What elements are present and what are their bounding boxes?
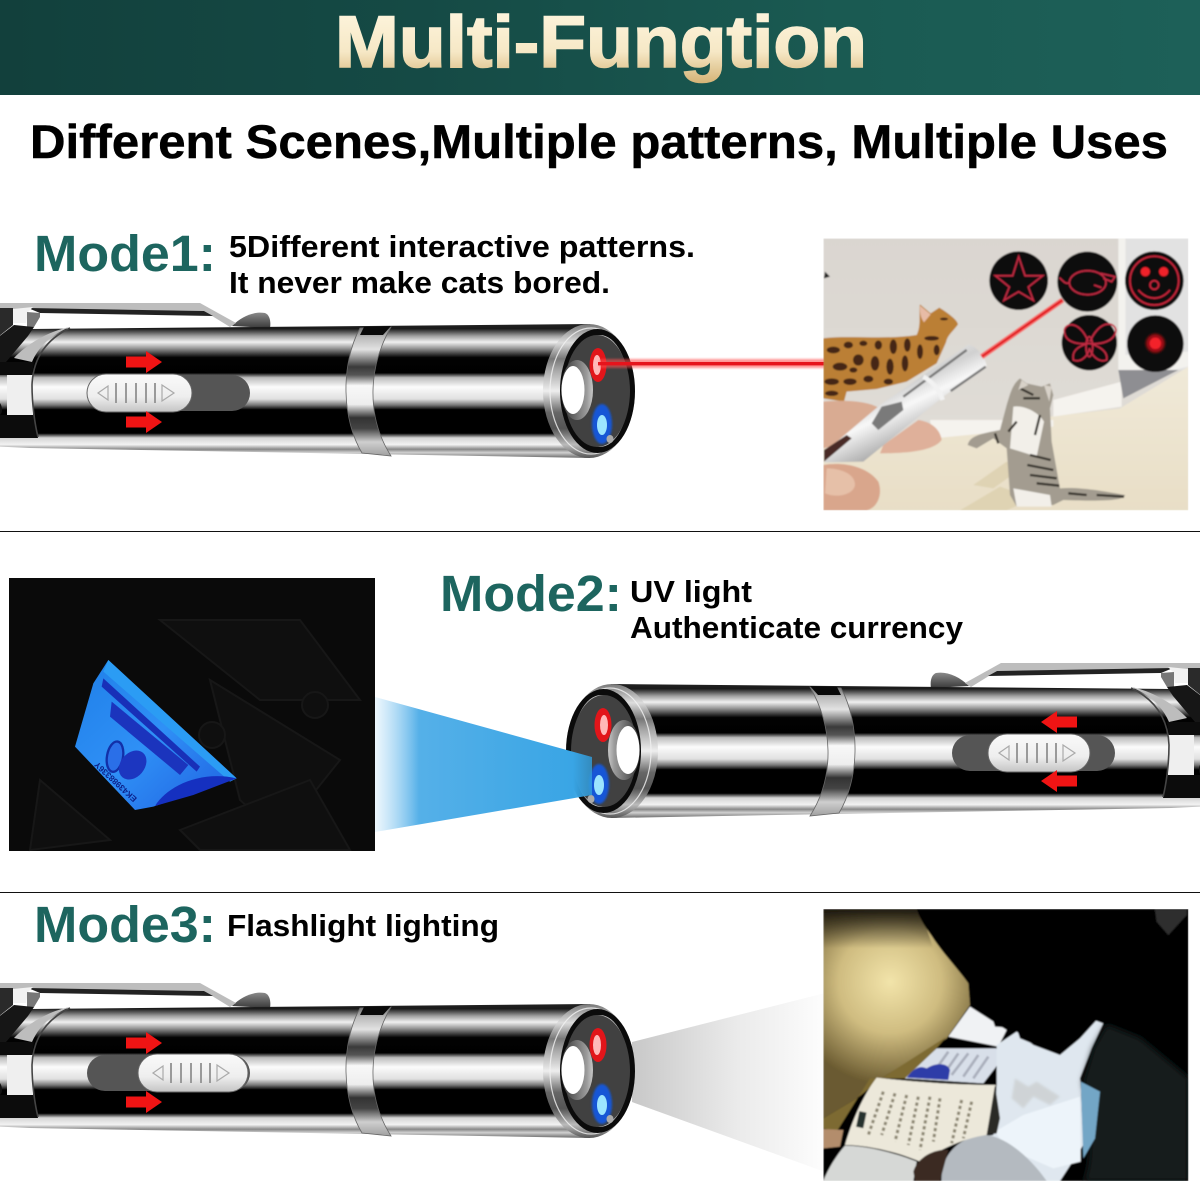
pattern: red dot <box>1127 315 1184 372</box>
photo: cats with laser patterns <box>823 238 1188 510</box>
photo: banknote under UV light <box>9 578 375 851</box>
serial number: EK43988336Y <box>92 760 139 804</box>
pattern: mouse <box>1057 252 1117 312</box>
mode 1 pen with slider <box>0 303 635 458</box>
subtitle: Different Scenes,Multiple patterns, Multiple Uses <box>30 115 1168 168</box>
pages and blanket <box>905 1007 1103 1181</box>
mode 3 description: Flashlight lighting <box>227 908 499 943</box>
mode 2 description: Authenticate currency <box>630 610 964 645</box>
mode 2 description <box>630 574 964 645</box>
divider 1 <box>0 531 1200 532</box>
kitten <box>968 378 1125 507</box>
pattern: smiley <box>1125 251 1184 310</box>
mode 1 description: It never make cats bored. <box>229 265 610 300</box>
direction arrows mode 2 <box>1041 711 1077 792</box>
pattern: star <box>989 251 1048 310</box>
hand holding pen <box>823 401 942 510</box>
pointer laser <box>982 300 1063 357</box>
mode 3 pen with slider <box>0 983 635 1138</box>
mode 1 description: 5Different interactive patterns. <box>229 229 695 264</box>
orange cat <box>823 304 958 402</box>
direction arrows mode 3 <box>126 1032 162 1113</box>
pattern: butterfly <box>1062 315 1117 370</box>
blue banknote <box>75 660 237 810</box>
mode 2 heading: Mode2: <box>440 565 622 622</box>
slider mode 2 <box>952 734 1115 772</box>
silver pointer <box>824 344 987 462</box>
slider mode 3 <box>87 1054 250 1092</box>
slider mode 1 <box>87 374 250 412</box>
header banner <box>0 0 1200 95</box>
mode 3 heading: Mode3: <box>34 896 216 953</box>
direction arrows mode 1 <box>126 351 162 433</box>
UV light beam <box>375 697 592 832</box>
title: Multi-Fungtion <box>335 2 867 83</box>
open book <box>823 1078 1000 1181</box>
person silhouette <box>917 909 1188 1181</box>
divider 2 <box>0 892 1200 893</box>
mode 2 pen with slider <box>566 663 1200 818</box>
mode 1 description <box>229 229 695 300</box>
laser beam <box>598 359 825 368</box>
mode 2 description: UV light <box>630 574 752 609</box>
mode 1 heading: Mode1: <box>34 225 216 282</box>
photo: reading by flashlight <box>823 909 1188 1181</box>
flashlight beam <box>632 993 825 1172</box>
